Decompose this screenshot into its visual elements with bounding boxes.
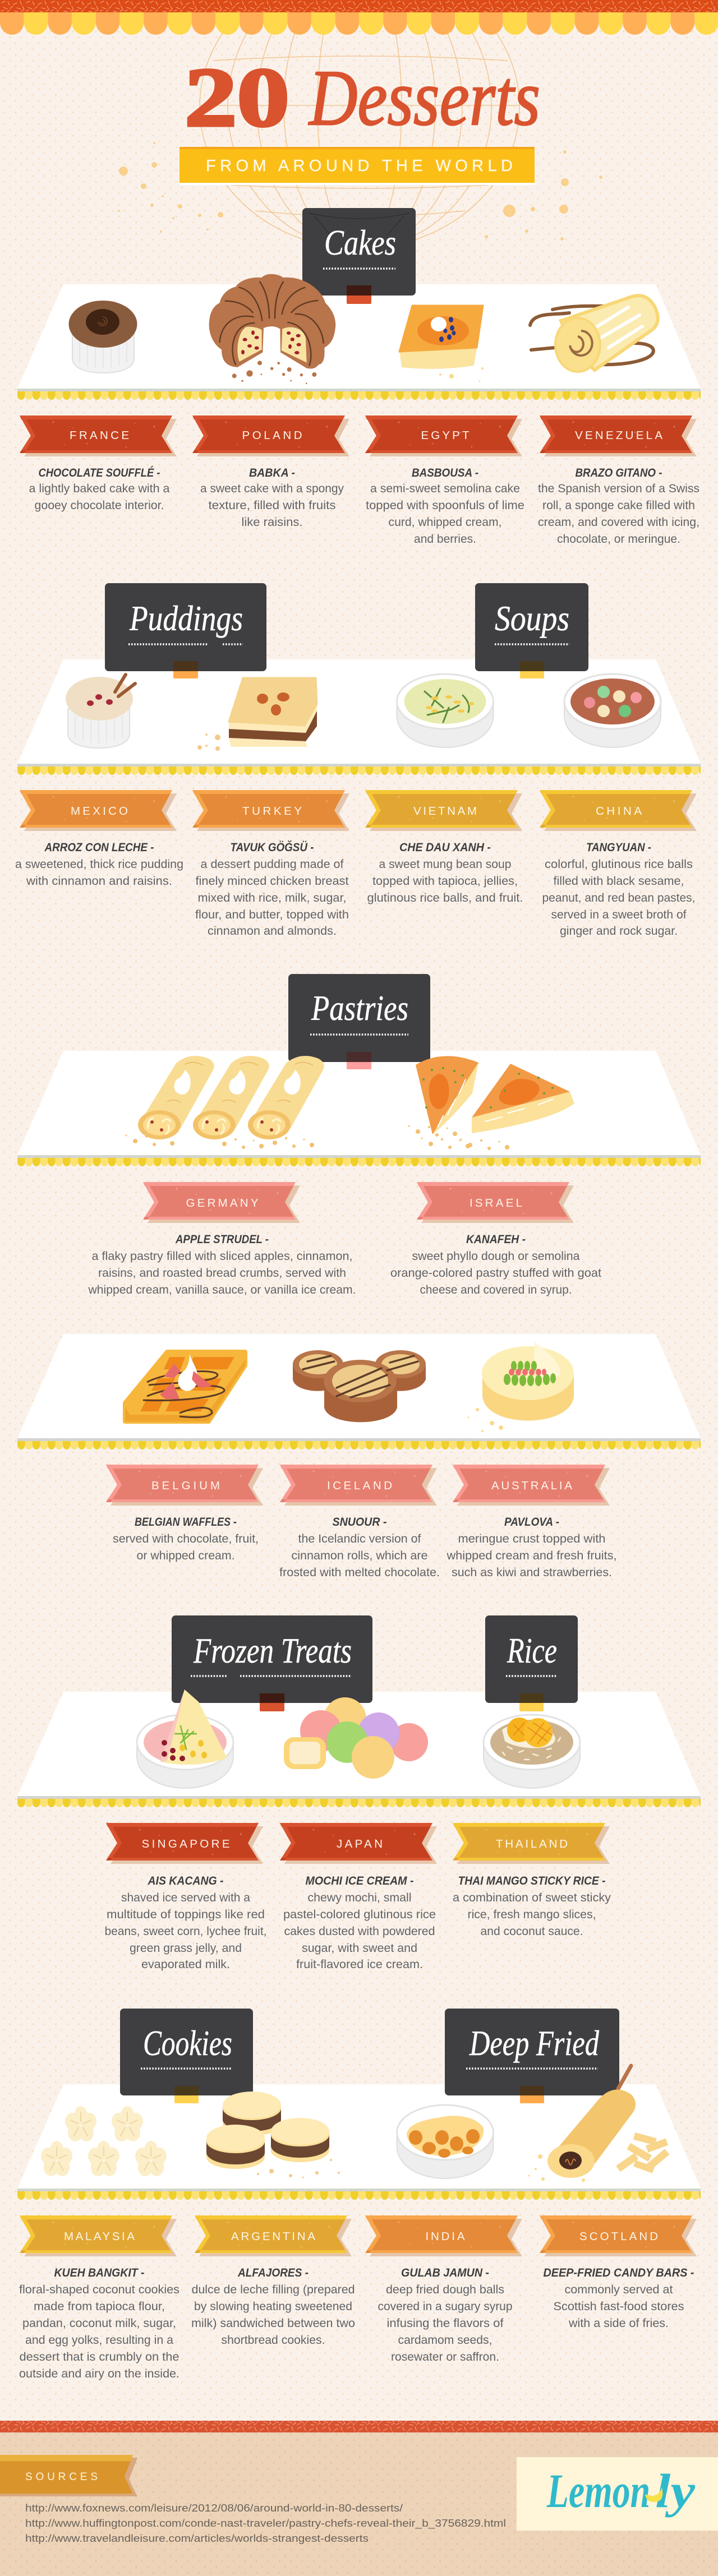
column: Turkey: a dessert pudding made of — [201, 858, 344, 871]
sign: Soups: Soups — [495, 598, 569, 638]
column: Turkey: mixed with rice, milk, sugar, — [197, 892, 347, 904]
column: Vietnam: VIETNAM — [413, 805, 477, 818]
table: pastries — [17, 1051, 701, 1166]
footer patterned band — [0, 2421, 718, 2432]
dessert: thai mango sticky rice — [484, 1715, 580, 1788]
column: Mexico: with cinnamon and raisins. — [26, 875, 172, 888]
column: Germany: GERMANY — [186, 1197, 259, 1209]
column: Singapore: shaved ice served with a — [121, 1891, 250, 1904]
column: India: infusing the flavors of — [387, 2317, 504, 2330]
column: Israel: cheese and covered in syrup. — [420, 1284, 572, 1296]
Lemonly logo: ly — [655, 2464, 696, 2518]
column: Poland: POLAND — [242, 429, 302, 442]
dessert: pavlova — [468, 1341, 574, 1432]
column: Germany: whipped cream, vanilla sauce, or vanilla ice cream. — [88, 1284, 356, 1296]
column: Turkey: cinnamon and almonds. — [208, 925, 337, 938]
column: India: GULAB JAMUN - — [401, 2266, 489, 2279]
column: Malaysia — [19, 2215, 180, 2380]
column: Egypt: BASBOUSA - — [412, 467, 478, 479]
column: Venezuela: chocolate, or meringue. — [557, 533, 680, 546]
table: frozen treats and rice — [17, 1692, 701, 1807]
column: France — [20, 416, 177, 512]
column: Germany: a flaky pastry filled with sliced apples, cinnamon, — [92, 1250, 352, 1263]
column: India: rosewater or saffron. — [391, 2351, 499, 2363]
column: Japan: cakes dusted with powdered — [284, 1925, 435, 1938]
column: Poland: BABKA - — [249, 467, 295, 479]
top awning: scallops — [0, 12, 718, 35]
dessert: tangyuan — [564, 674, 661, 747]
column: Belgium: BELGIAN WAFFLES - — [135, 1516, 237, 1529]
column: Mexico: ARROZ CON LECHE - — [44, 841, 154, 854]
subtitle banner — [180, 147, 535, 185]
sign: Pastries — [288, 974, 430, 1069]
column: Malaysia: floral-shaped coconut cookies — [19, 2283, 180, 2296]
column: Argentina: shortbread cookies. — [221, 2334, 325, 2347]
sources ribbon: SOURCES — [25, 2471, 98, 2483]
column: Singapore: AIS KACANG - — [148, 1875, 223, 1887]
column: Venezuela: the Spanish version of a Swiss — [538, 482, 699, 495]
column: Turkey: flour, and butter, topped with — [195, 908, 349, 921]
column: Singapore — [104, 1823, 267, 1971]
column: Turkey: finely minced chicken breast — [195, 875, 349, 888]
column: Mexico — [15, 790, 183, 888]
column: Thailand: THAILAND — [496, 1838, 568, 1850]
footer background — [0, 2432, 718, 2576]
column: India: covered in a sugary syrup — [378, 2300, 513, 2313]
column: France: a lightly baked cake with a — [29, 482, 170, 495]
column: China: CHINA — [596, 805, 642, 818]
column: Argentina: dulce de leche filling (prepared — [192, 2283, 355, 2296]
column: Egypt: a semi-sweet semolina cake — [370, 482, 520, 495]
Lemonly logo: Lemon — [546, 2464, 650, 2518]
column: Argentina: ARGENTINA — [231, 2230, 315, 2243]
column: Iceland: ICELAND — [327, 1479, 392, 1492]
column: Scotland: commonly served at — [564, 2283, 673, 2296]
sign: Frozen Treats: Frozen Treats — [193, 1631, 352, 1670]
column: Venezuela: cream, and covered with icing, — [538, 516, 699, 529]
sign: Puddings: Puddings — [129, 598, 243, 638]
column: Belgium — [106, 1465, 263, 1562]
column: China: colorful, glutinous rice balls — [545, 858, 693, 871]
column: Israel: orange-colored pastry stuffed with goat — [390, 1267, 601, 1280]
column: Poland — [192, 416, 349, 529]
column: Belgium: BELGIUM — [151, 1479, 220, 1492]
column: Thailand: rice, fresh mango slices, — [468, 1908, 596, 1921]
table: pastries second row — [17, 1334, 701, 1449]
column: Turkey — [192, 790, 349, 938]
sign: Soups — [475, 583, 588, 678]
globe line drawing behind title — [200, 0, 519, 248]
column: India — [365, 2215, 522, 2363]
sign: Cookies — [120, 2009, 253, 2103]
column: Poland: like raisins. — [241, 516, 303, 529]
column: Israel: ISRAEL — [470, 1197, 522, 1209]
dessert: basbousa — [399, 306, 484, 382]
source links: http://www.travelandleisure.com/articles/worlds-strangest-desserts — [25, 2532, 369, 2544]
source links — [25, 2502, 506, 2544]
column: Japan — [280, 1823, 437, 1971]
sign: Cakes: Cakes — [324, 223, 396, 262]
column: Iceland: SNUOUR - — [332, 1516, 387, 1529]
column: France: FRANCE — [70, 429, 129, 442]
column: China: served in a sweet broth of — [551, 908, 687, 921]
column: Singapore: evaporated milk. — [141, 1958, 230, 1971]
column: Scotland — [540, 2215, 697, 2330]
column: Scotland: DEEP-FRIED CANDY BARS - — [543, 2266, 694, 2279]
column: China — [540, 790, 697, 938]
section: cookies and deep fried labels — [19, 2215, 697, 2380]
dessert: ais kacang — [137, 1689, 233, 1788]
column: Scotland: Scottish fast-food stores — [553, 2300, 684, 2313]
column: Egypt: curd, whipped cream, — [388, 516, 501, 529]
sign: Rice — [485, 1615, 578, 1711]
dessert: chocolate souffle — [68, 301, 137, 373]
title word Desserts: Desserts — [308, 53, 540, 142]
column: Iceland — [279, 1465, 440, 1579]
section: pudding and soup labels — [15, 790, 697, 938]
column: Egypt: EGYPT — [421, 429, 470, 442]
source links: http://www.huffingtonpost.com/conde-nast-traveler/pastry-chefs-reveal-their_b_3756829.html — [25, 2517, 506, 2529]
column: Singapore: green grass jelly, and — [130, 1942, 242, 1955]
column: Egypt: topped with spoonfuls of lime — [366, 499, 524, 512]
section: frozen treats and rice labels — [104, 1823, 611, 1971]
column: Turkey: TAVUK GÖĞSÜ - — [230, 841, 314, 854]
column: China: peanut, and red bean pastes, — [542, 892, 696, 904]
column: Japan: MOCHI ICE CREAM - — [305, 1875, 414, 1887]
decorative syrup drops — [118, 142, 602, 241]
column: Belgium: served with chocolate, fruit, — [113, 1532, 259, 1545]
column: Vietnam: a sweet mung bean soup — [379, 858, 512, 871]
column: India: deep fried dough balls — [386, 2283, 504, 2296]
column: China: ginger and rock sugar. — [560, 925, 678, 938]
column: Thailand — [453, 1823, 611, 1938]
dessert: kanafeh — [408, 1056, 574, 1150]
section: cake labels — [20, 416, 699, 546]
Lemonly logo — [517, 2457, 718, 2531]
column: Israel — [390, 1182, 601, 1296]
column: Argentina: milk) sandwiched between two — [191, 2317, 355, 2330]
column: Vietnam: CHE DAU XANH - — [399, 841, 491, 854]
column: Japan: sugar, with sweet and — [302, 1942, 417, 1955]
column: France: CHOCOLATE SOUFFLÉ - — [38, 467, 160, 479]
column: Vietnam: topped with tapioca, jellies, — [372, 875, 518, 888]
column: China: TANGYUAN - — [586, 841, 651, 854]
column: Mexico: a sweetened, thick rice pudding — [15, 858, 183, 871]
dessert: babka — [209, 274, 335, 384]
column: Venezuela: roll, a sponge cake filled with — [542, 499, 695, 512]
column: Belgium: or whipped cream. — [137, 1549, 234, 1562]
title — [185, 51, 540, 144]
column: China: filled with black sesame, — [553, 875, 684, 888]
source links: http://www.foxnews.com/leisure/2012/08/06/around-world-in-80-desserts/ — [25, 2502, 403, 2514]
column: Australia: PAVLOVA - — [504, 1516, 559, 1529]
dessert: kueh bangkit — [41, 2106, 167, 2176]
column: Israel: sweet phyllo dough or semolina — [412, 1250, 580, 1263]
dessert: alfajores — [206, 2092, 340, 2178]
column: Australia: such as kiwi and strawberries. — [452, 1566, 612, 1579]
column: Argentina: ALFAJORES - — [237, 2266, 309, 2279]
column: Venezuela: BRAZO GITANO - — [576, 467, 662, 479]
section: pastry labels, first row — [88, 1182, 601, 1296]
dessert: brazo gitano — [530, 296, 658, 372]
sign: Cakes — [302, 208, 416, 304]
column: India: cardamom seeds, — [398, 2334, 493, 2347]
sign: Cookies: Cookies — [143, 2023, 232, 2063]
table: cookies and deep fried — [17, 2084, 701, 2200]
sign: Deep Fried — [445, 2009, 619, 2103]
column: Scotland: SCOTLAND — [579, 2230, 658, 2243]
dessert: mochi ice cream — [284, 1697, 428, 1779]
column: Australia — [446, 1465, 617, 1579]
dessert: tavuk gogsu — [197, 678, 317, 751]
top awning: patterned band — [0, 0, 718, 12]
column: Vietnam — [365, 790, 523, 904]
column: Singapore: multitude of toppings like red — [107, 1908, 265, 1921]
dessert: deep-fried candy bar with fries — [528, 2066, 669, 2182]
column: Argentina: by slowing heating sweetened — [194, 2300, 352, 2313]
column: Iceland: frosted with melted chocolate. — [279, 1566, 440, 1579]
column: Japan: pastel-colored glutinous rice — [283, 1908, 436, 1921]
column: France: gooey chocolate interior. — [35, 499, 164, 512]
column: Germany — [88, 1182, 356, 1296]
column: Venezuela: VENEZUELA — [575, 429, 662, 442]
sign: Rice: Rice — [507, 1631, 557, 1670]
dessert: apple strudel — [126, 1056, 324, 1149]
column: Australia: AUSTRALIA — [491, 1479, 572, 1492]
column: Australia: meringue crust topped with — [458, 1532, 606, 1545]
column: Malaysia: outside and airy on the inside. — [19, 2367, 180, 2380]
title number 20: 20 — [185, 51, 289, 144]
column: Malaysia: and egg yolks, resulting in a — [25, 2334, 173, 2347]
column: Japan: JAPAN — [337, 1838, 383, 1850]
column: Malaysia: dessert that is crumbly on the — [19, 2351, 180, 2363]
column: Venezuela — [538, 416, 699, 546]
column: Poland: texture, filled with fruits — [209, 499, 335, 512]
column: Australia: whipped cream and fresh fruits, — [446, 1549, 617, 1562]
sign: Deep Fried: Deep Fried — [469, 2023, 600, 2063]
table: cakes — [17, 284, 701, 400]
column: Iceland: the Icelandic version of — [298, 1532, 421, 1545]
column: Japan: chewy mochi, small — [307, 1891, 412, 1904]
column: Israel: KANAFEH - — [466, 1233, 526, 1246]
column: Malaysia: made from tapioca flour, — [34, 2300, 165, 2313]
column: Malaysia: MALAYSIA — [64, 2230, 135, 2243]
column: Germany: APPLE STRUDEL - — [175, 1233, 269, 1246]
column: Mexico: MEXICO — [71, 805, 128, 818]
column: Turkey: TURKEY — [242, 805, 302, 818]
dessert: gulab jamun — [397, 2105, 494, 2178]
dessert: arroz con leche — [66, 675, 135, 748]
column: Iceland: cinnamon rolls, which are — [292, 1549, 427, 1562]
column: Malaysia: pandan, coconut milk, sugar, — [22, 2317, 176, 2330]
column: Thailand: and coconut sauce. — [480, 1925, 583, 1938]
subtitle text: FROM AROUND THE WORLD — [206, 157, 513, 175]
dessert: che dau xanh — [397, 674, 494, 747]
column: Thailand: a combination of sweet sticky — [453, 1891, 611, 1904]
table: puddings and soups — [17, 659, 701, 775]
column: Singapore: SINGAPORE — [141, 1838, 230, 1850]
column: Argentina — [191, 2215, 355, 2347]
dessert: belgian waffles — [125, 1352, 245, 1421]
column: Singapore: beans, sweet corn, lychee fruit, — [104, 1925, 267, 1938]
column: Poland: a sweet cake with a spongy — [200, 482, 344, 495]
column: Vietnam: glutinous rice balls, and fruit. — [367, 892, 523, 904]
column: Egypt: and berries. — [414, 533, 476, 546]
sources ribbon — [0, 2455, 137, 2496]
section: pastry labels, second row — [106, 1465, 617, 1579]
column: Malaysia: KUEH BANGKIT - — [54, 2266, 145, 2279]
sign: Pastries: Pastries — [311, 988, 408, 1028]
column: Thailand: THAI MANGO STICKY RICE - — [458, 1875, 606, 1887]
column: Japan: fruit-flavored ice cream. — [296, 1958, 423, 1971]
column: Egypt — [365, 416, 524, 546]
column: Germany: raisins, and roasted bread crumbs, served with — [98, 1267, 346, 1280]
dessert: snuour — [293, 1350, 426, 1422]
column: Scotland: with a side of fries. — [568, 2317, 669, 2330]
sign: Frozen Treats — [172, 1615, 372, 1711]
sign: Puddings — [105, 583, 266, 678]
column: India: INDIA — [425, 2230, 465, 2243]
